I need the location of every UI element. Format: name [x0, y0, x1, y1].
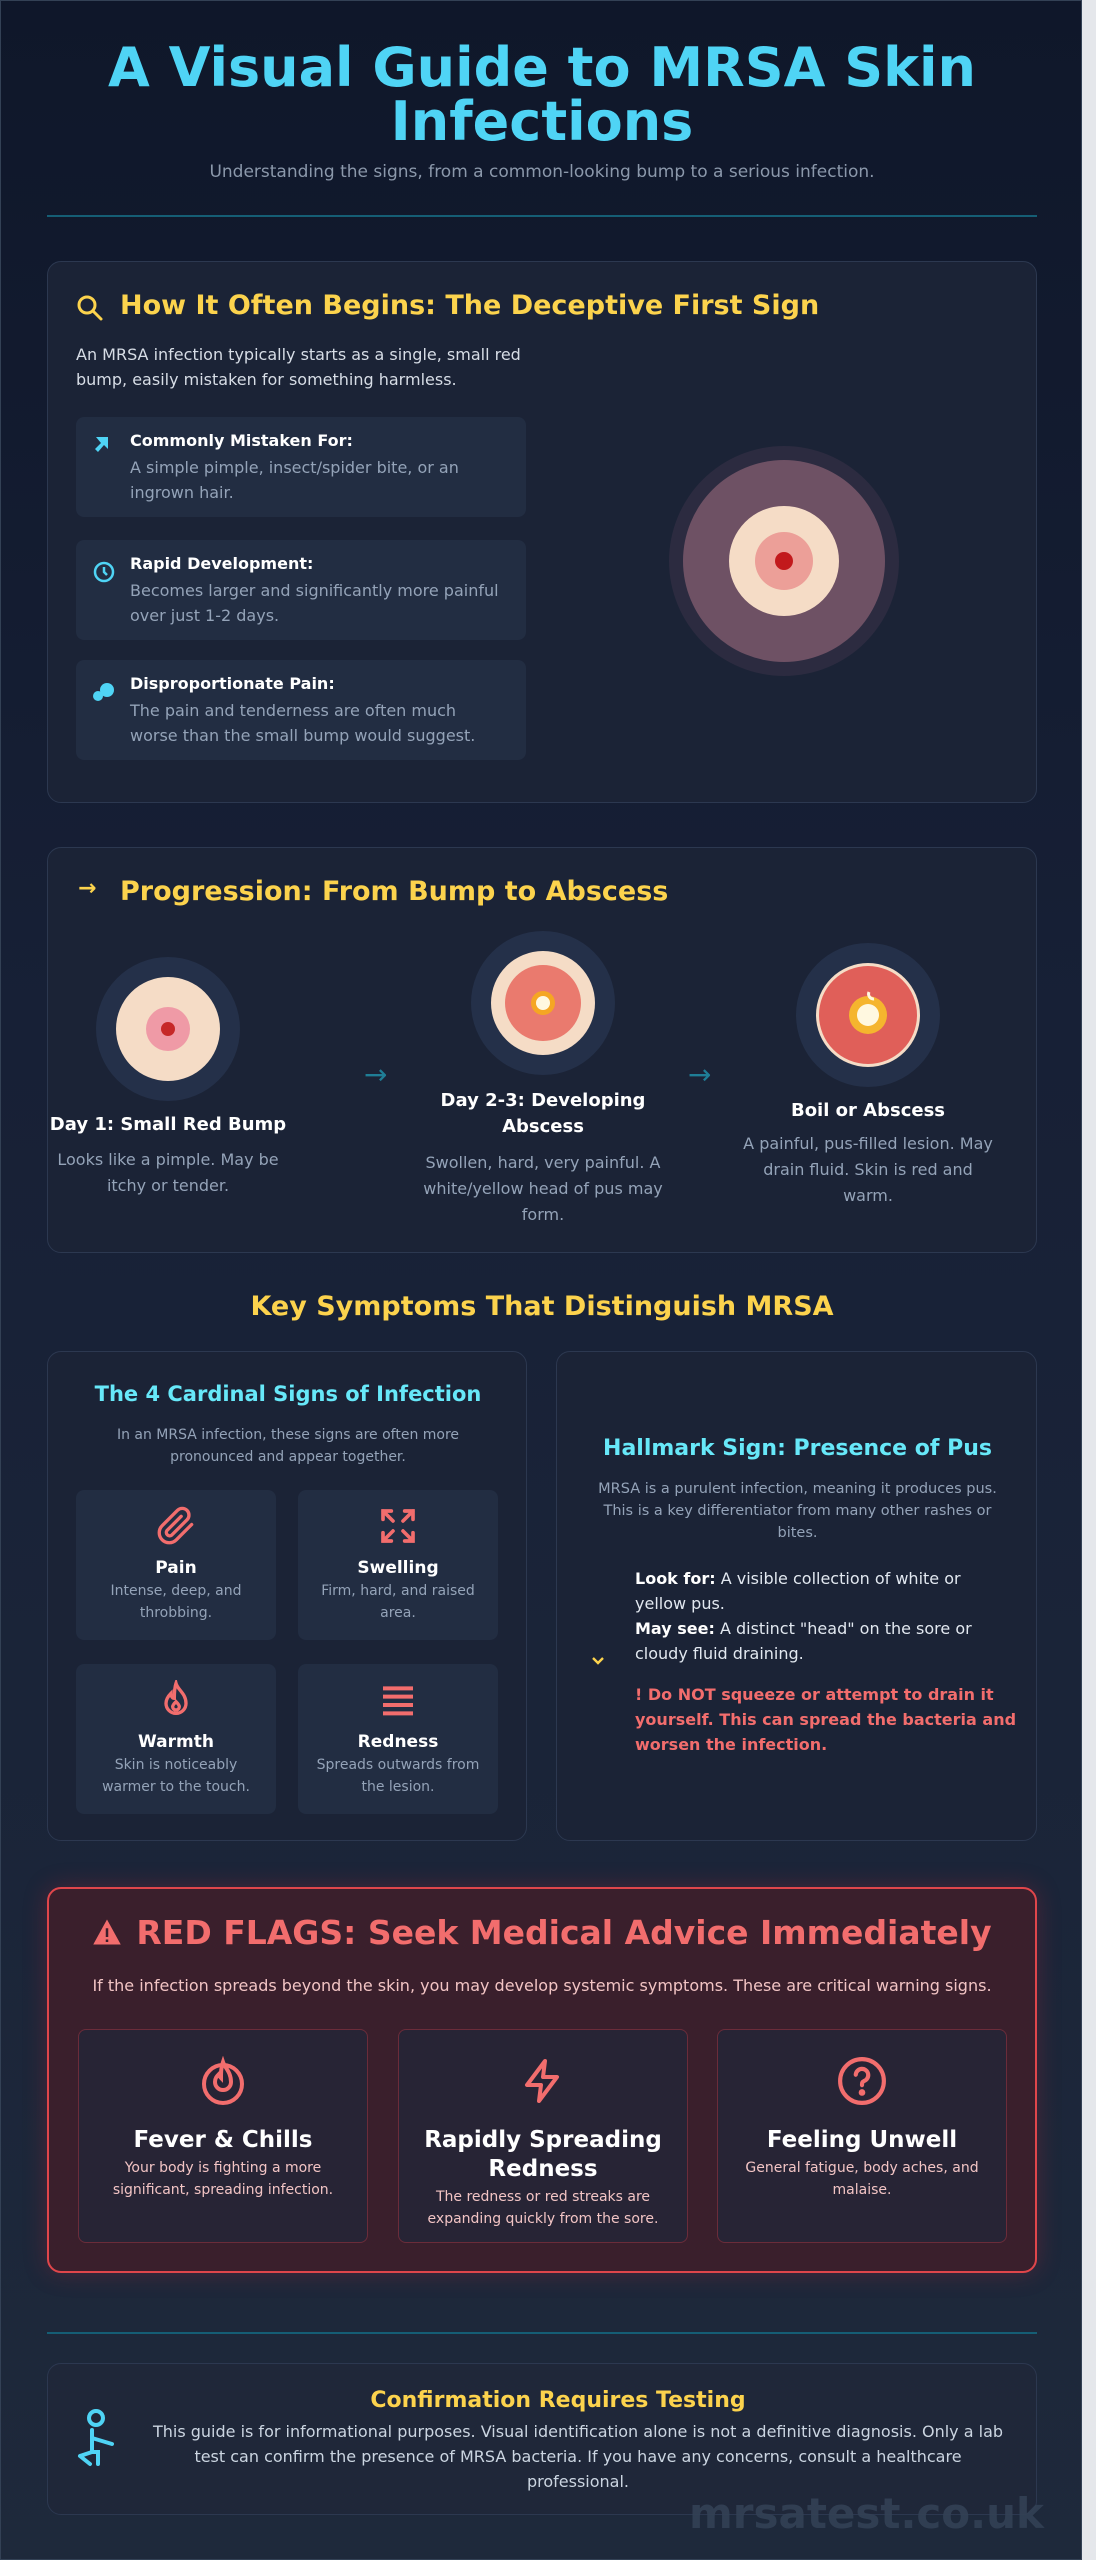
- card: spreading redness: The redness or red streaks are expanding quickly from the sore.: [428, 2189, 658, 2227]
- card: rapid: Rapid Development:: [130, 554, 313, 573]
- panel: confirmation: [47, 2363, 1037, 2515]
- title: A Visual Guide to MRSA Skin: [108, 36, 976, 99]
- tile: warmth: [76, 1664, 276, 1814]
- stage 2: Swollen, hard, very painful. A white/yellow head of pus may form.: [423, 1153, 663, 1224]
- icon: person: [78, 2409, 114, 2466]
- card: pain: [76, 660, 526, 760]
- stage 3: [743, 943, 993, 1205]
- icon: chevron: [592, 1657, 604, 1665]
- icon: search: [78, 296, 103, 321]
- stage 2: [423, 931, 663, 1224]
- tile: swelling: [298, 1490, 498, 1640]
- description: MRSA is a purulent infection, meaning it produces pus. This is a key differentiator from many other rashes or bites.: [598, 1481, 997, 1541]
- card: mistaken: A simple pimple, insect/spider bite, or an ingrown hair.: [130, 458, 459, 502]
- stage 1: Looks like a pimple. May be itchy or tender.: [57, 1150, 279, 1195]
- card: fever: [78, 2029, 368, 2243]
- description: In an MRSA infection, these signs are often more pronounced and appear together.: [117, 1427, 459, 1465]
- tile: warmth: Skin is noticeably warmer to the touch.: [102, 1757, 250, 1795]
- red flags intro: If the infection spreads beyond the skin, you may develop systemic symptoms. These are critical warning signs.: [92, 1976, 992, 1995]
- illustration: bump: [669, 446, 899, 676]
- look for list: Look for: A visible collection of white or yellow pus.: [635, 1569, 961, 1613]
- heading: Progression: From Bump to Abscess: [120, 876, 668, 907]
- card: fever: Fever & Chills: [134, 2127, 312, 2153]
- warning: ! Do NOT squeeze or attempt to drain it yourself. This can spread the bacteria and worsen the infection.: [635, 1685, 1016, 1754]
- title: Confirmation Requires Testing: [370, 2388, 746, 2413]
- heading: How It Often Begins: The Deceptive First Sign: [120, 290, 819, 321]
- tile: warmth: Warmth: [138, 1732, 214, 1752]
- arrow 1: →: [364, 1058, 387, 1091]
- intro text: An MRSA infection typically starts as a single, small red bump, easily mistaken for something harmless.: [76, 345, 521, 389]
- card: pain: The pain and tenderness are often much worse than the small bump would suggest.: [130, 701, 475, 745]
- panel: cardinal signs: [47, 1351, 527, 1841]
- stage 1: [50, 957, 286, 1195]
- card: spreading redness: [398, 2029, 688, 2243]
- card: rapid: [76, 540, 526, 640]
- card: mistaken: [76, 417, 526, 517]
- card: rapid: Becomes larger and significantly more painful over just 1-2 days.: [130, 581, 499, 625]
- title: [108, 36, 976, 153]
- card: mistaken: Commonly Mistaken For:: [130, 431, 353, 450]
- red flags heading: RED FLAGS: Seek Medical Advice Immediately: [136, 1913, 992, 1952]
- card: spreading redness: Rapidly Spreading Redness: [424, 2127, 662, 2182]
- heading: key symptoms: Key Symptoms That Distinguish MRSA: [250, 1291, 834, 1322]
- icon: arrow: →: [78, 876, 96, 901]
- subheading: Hallmark Sign: Presence of Pus: [603, 1436, 992, 1461]
- tile: pain: [76, 1490, 276, 1640]
- tile: redness: Redness: [358, 1732, 438, 1752]
- panel: hallmark sign: [556, 1351, 1037, 1841]
- stage 1: Day 1: Small Red Bump: [50, 1114, 286, 1135]
- arrow 2: →: [688, 1058, 711, 1091]
- card: unwell: Feeling Unwell: [767, 2127, 957, 2153]
- card: unwell: General fatigue, body aches, and malaise.: [745, 2160, 979, 2198]
- subtitle: Understanding the signs, from a common-looking bump to a serious infection.: [209, 162, 875, 182]
- title: Infections: [391, 90, 693, 153]
- card: fever: Your body is fighting a more significant, spreading infection.: [113, 2160, 333, 2198]
- tile: pain: Intense, deep, and throbbing.: [110, 1583, 242, 1621]
- tile: swelling: Swelling: [357, 1558, 439, 1578]
- stage 3: Boil or Abscess: [791, 1100, 945, 1121]
- text: This guide is for informational purposes. Visual identification alone is not a definitive diagnosis. Only a lab test can confirm the presence of MRSA bacteria. If you have any concerns, consult a healthcare professional.: [153, 2422, 1003, 2491]
- tile: redness: Spreads outwards from the lesion.: [317, 1757, 479, 1795]
- panel: progression: [47, 847, 1037, 1253]
- tile: pain: Pain: [155, 1558, 197, 1578]
- card: pain: Disproportionate Pain:: [130, 674, 335, 693]
- card: unwell: [717, 2029, 1007, 2243]
- tile: redness: [298, 1664, 498, 1814]
- look for list: [635, 1569, 972, 1663]
- subheading: The 4 Cardinal Signs of Infection: [95, 1382, 481, 1406]
- look for list: May see: A distinct "head" on the sore or cloudy fluid draining.: [635, 1619, 972, 1663]
- tile: swelling: Firm, hard, and raised area.: [321, 1583, 475, 1621]
- stage 3: A painful, pus-filled lesion. May drain fluid. Skin is red and warm.: [743, 1134, 993, 1205]
- panel: how it begins: [47, 261, 1037, 803]
- watermark: mrsatest.co.uk: [689, 2489, 1044, 2538]
- stage 2: Day 2-3: Developing Abscess: [441, 1090, 645, 1137]
- panel: red flags: [47, 1887, 1037, 2273]
